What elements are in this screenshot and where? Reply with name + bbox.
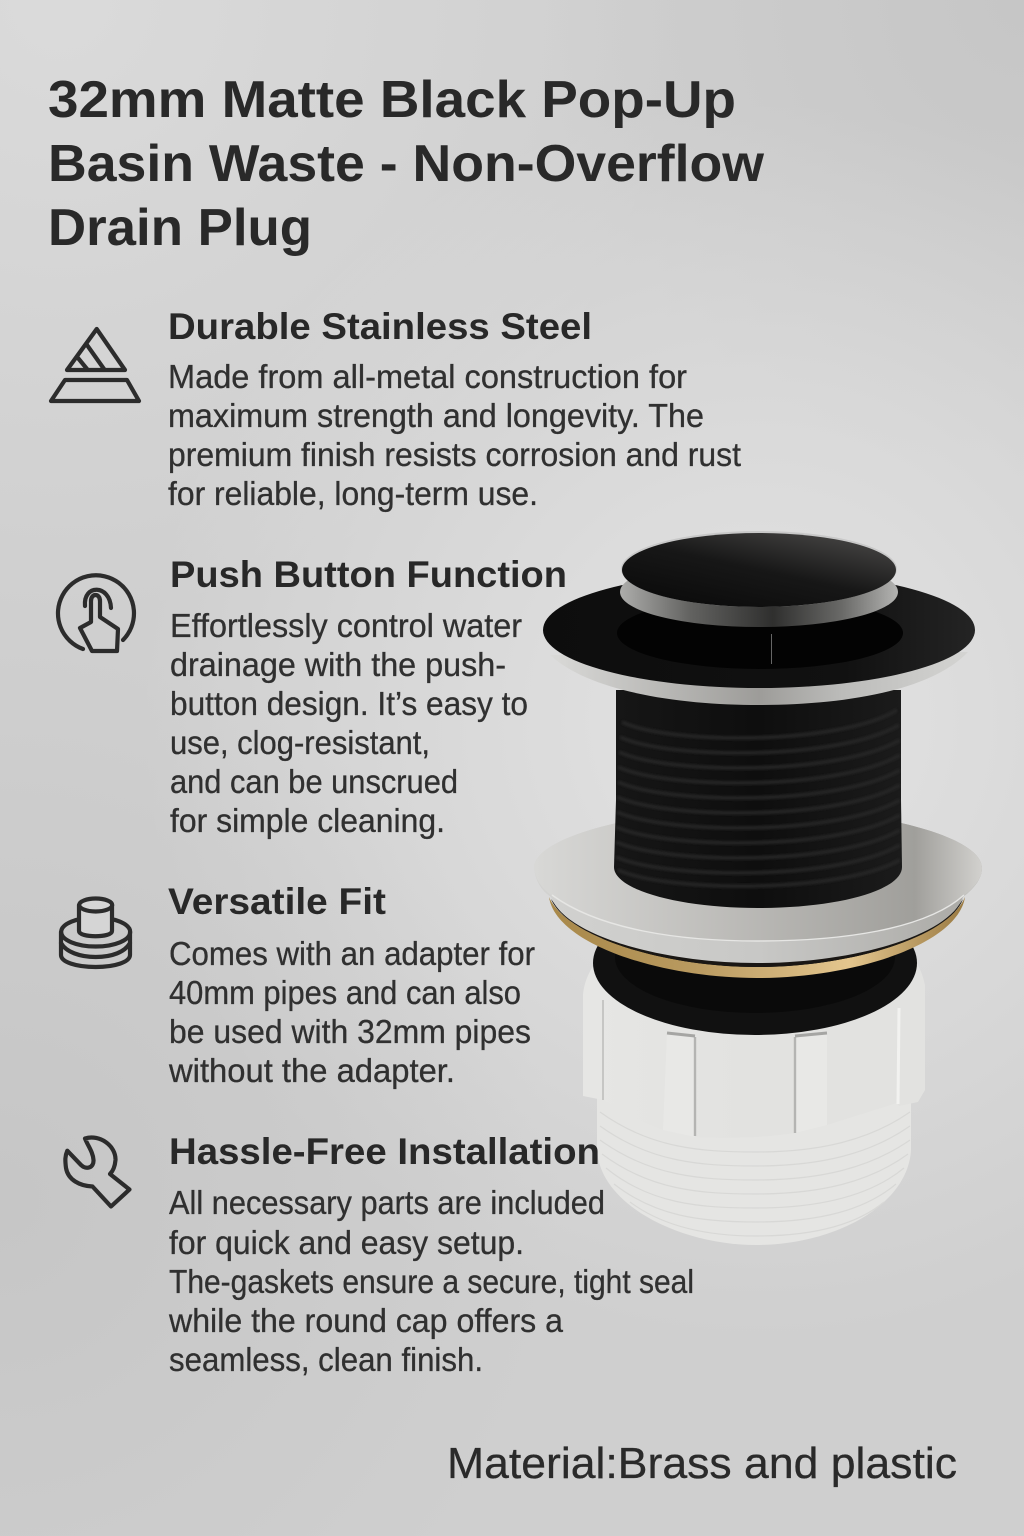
material note: Material:Brass and plastic — [447, 1439, 957, 1488]
body text: button design. It’s easy to — [170, 685, 528, 722]
body text — [168, 1184, 694, 1378]
heading: Durable Stainless Steel — [168, 306, 592, 347]
title: 32mm Matte Black Pop-Up — [48, 71, 736, 129]
body text: for reliable, long-term use. — [168, 475, 538, 512]
body text: Effortlessly control water — [170, 607, 522, 644]
icon: finger pressing button — [58, 575, 134, 651]
title — [48, 71, 765, 257]
body text: The-gaskets ensure a secure, tight seal — [169, 1263, 694, 1300]
push button cap — [621, 531, 897, 607]
body text: maximum strength and longevity. The — [168, 397, 704, 434]
icon: wrench — [65, 1138, 130, 1206]
dark seal line above ring — [551, 899, 963, 967]
lower grey flange — [534, 808, 982, 963]
upper flange — [543, 572, 975, 705]
body text: premium finish resists corrosion and rust — [168, 436, 741, 473]
title: Drain Plug — [48, 199, 312, 257]
body text: without the adapter. — [168, 1052, 455, 1089]
body text: for quick and easy setup. — [169, 1224, 524, 1261]
heading: Push Button Function — [170, 554, 567, 595]
body text: be used with 32mm pipes — [169, 1013, 531, 1050]
body text: drainage with the push- — [170, 646, 506, 683]
body text: while the round cap offers a — [168, 1302, 564, 1339]
body text: Comes with an adapter for — [169, 935, 535, 972]
product image: pop-up drain plug — [534, 531, 982, 1245]
body text: Made from all-metal construction for — [168, 358, 687, 395]
brass ring — [549, 897, 965, 978]
body text — [170, 607, 528, 839]
body text — [168, 935, 535, 1089]
panel: durable stainless steel — [51, 306, 741, 512]
body text: seamless, clean finish. — [169, 1341, 483, 1378]
dark flange opening — [617, 597, 903, 669]
body text: and can be unscrued — [170, 763, 458, 800]
panel: push button function — [58, 554, 567, 839]
body text: for simple cleaning. — [170, 802, 445, 839]
black rubber gasket — [593, 891, 917, 1036]
icon: layered pyramid — [51, 329, 139, 401]
threaded white lower body — [597, 1090, 911, 1245]
heading: Hassle-Free Installation — [169, 1131, 600, 1172]
heading: Versatile Fit — [168, 881, 386, 922]
body text — [168, 358, 741, 512]
grey stem ring — [620, 557, 898, 627]
body text: All necessary parts are included — [169, 1184, 605, 1221]
body text: 40mm pipes and can also — [169, 974, 521, 1011]
black threaded cylinder — [614, 690, 902, 908]
panel: hassle-free installation — [65, 1131, 694, 1378]
panel: versatile fit — [61, 881, 535, 1089]
icon: stacked adapter — [61, 898, 130, 967]
body text: use, clog-resistant, — [170, 724, 430, 761]
title: Basin Waste - Non-Overflow — [48, 135, 765, 193]
white coupling nut — [583, 957, 925, 1138]
